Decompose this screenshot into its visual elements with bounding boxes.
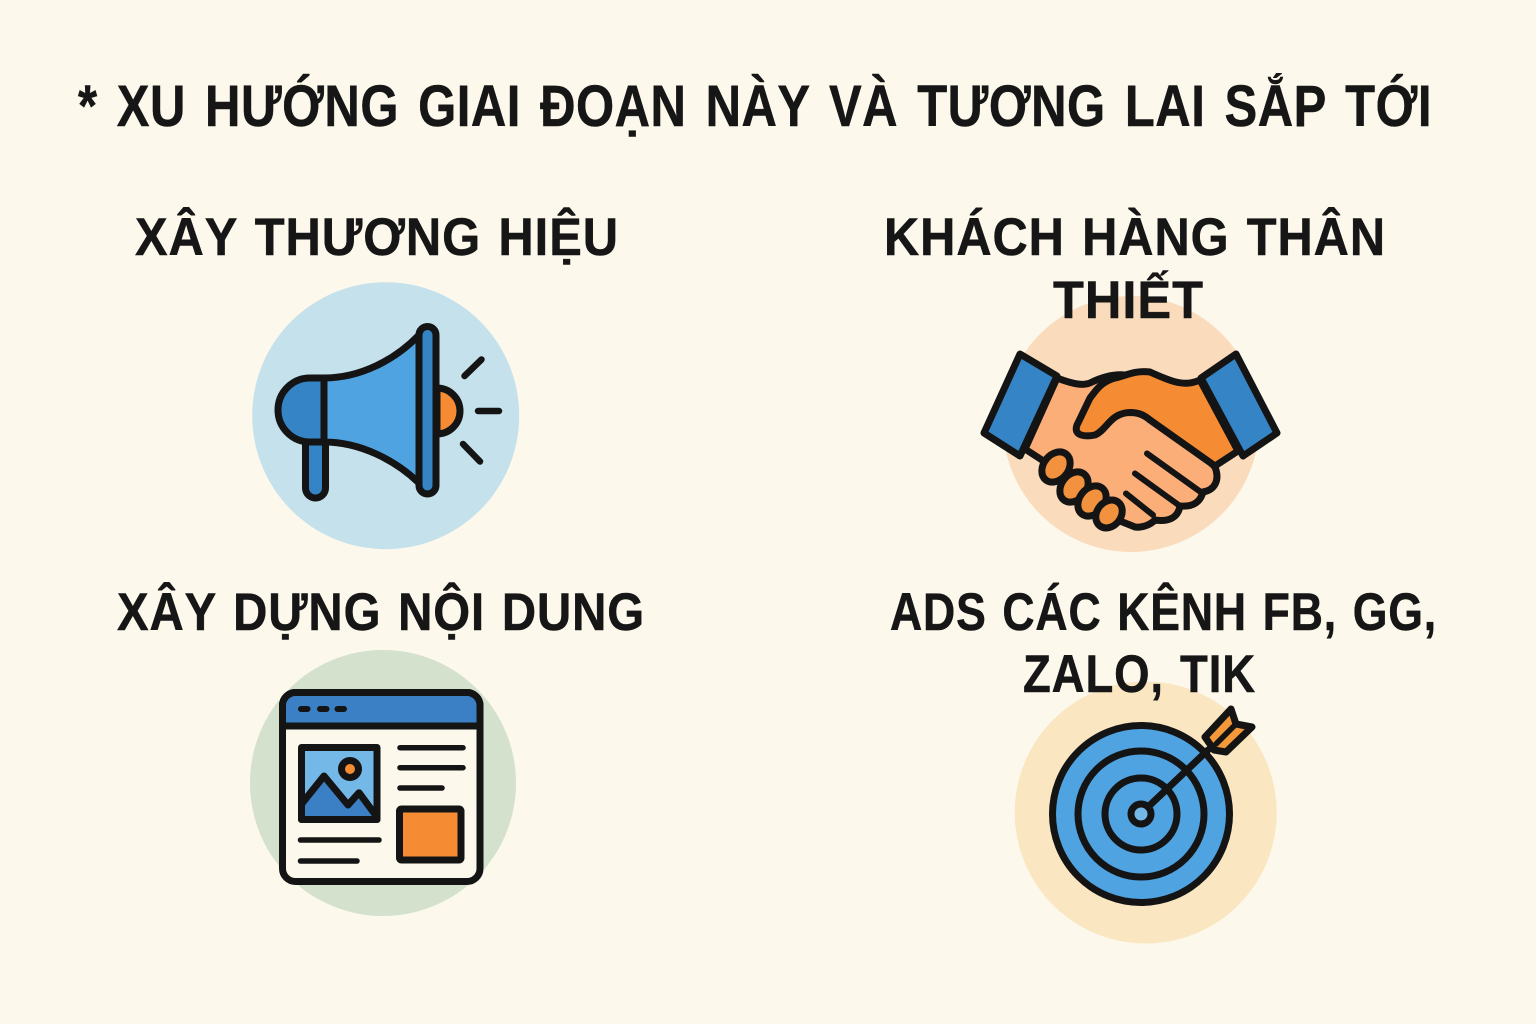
icon: handshake xyxy=(984,296,1277,552)
icon: web page content xyxy=(250,650,516,916)
heading: ads các kênh xyxy=(890,581,1437,704)
heading: ads các kênh: ZALO, TIK xyxy=(1023,645,1256,704)
heading: khách hàng thân thiết xyxy=(884,206,1386,330)
heading: xây dựng nội dung: XÂY DỰNG NỘI DUNG xyxy=(117,581,645,642)
heading: khách hàng thân thiết: KHÁCH HÀNG THÂN xyxy=(884,206,1386,267)
heading: xây thương hiệu: XÂY THƯƠNG HIỆU xyxy=(135,206,619,267)
icon: target with arrow xyxy=(1015,682,1277,944)
heading: ads các kênh: ADS CÁC KÊNH FB, GG, xyxy=(890,581,1437,642)
icon: megaphone xyxy=(252,282,519,549)
heading: khách hàng thân thiết: THIẾT xyxy=(1053,270,1204,330)
